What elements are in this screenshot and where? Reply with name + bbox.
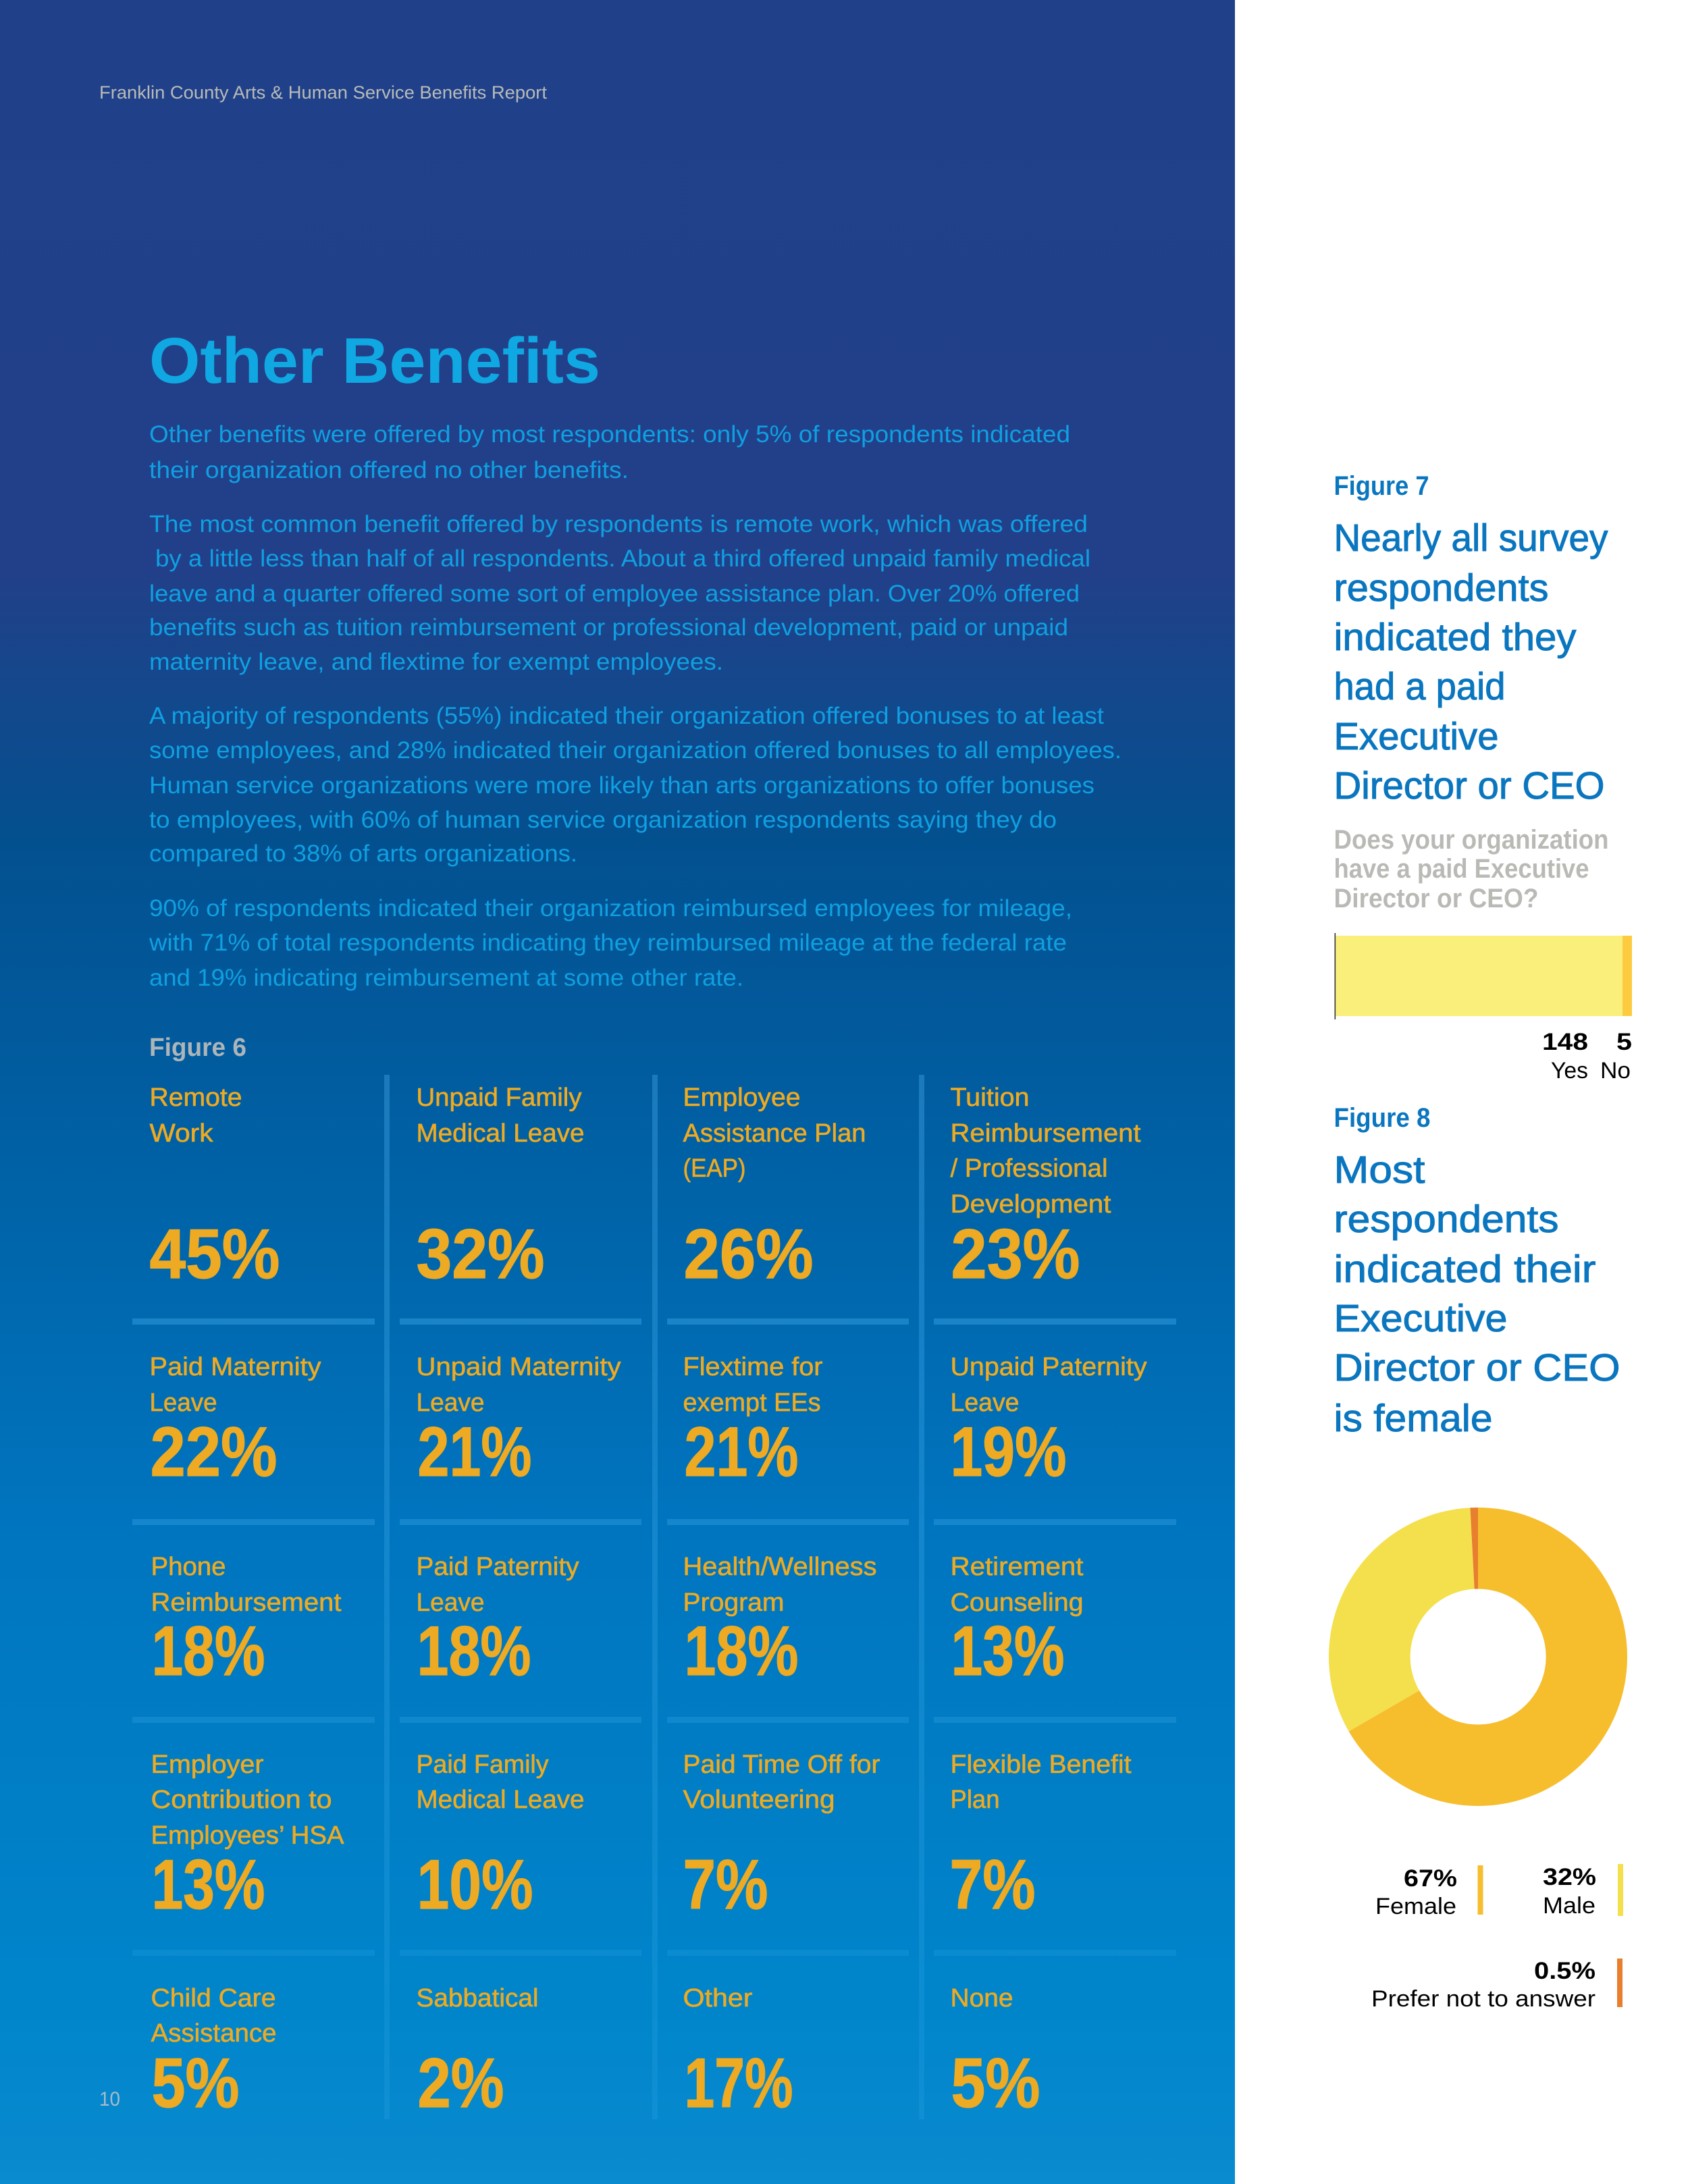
text block: figure 7 headline: Director or CEO (1334, 764, 1604, 807)
legend: Male 32% (1543, 1864, 1623, 1919)
stat: Paid Family Medical Leave: Paid Family (416, 1751, 548, 1779)
stat: Unpaid Paternity Leave: Leave (951, 1389, 1020, 1417)
stat: Unpaid Paternity Leave: Unpaid Paternity (951, 1353, 1146, 1381)
stat: Flexible Benefit Plan: Flexible Benefit (951, 1751, 1132, 1779)
stat: Paid Maternity Leave: Leave (150, 1389, 217, 1417)
stat: Employee Assistance Plan: Employee (683, 1084, 801, 1112)
stat: Sabbatical: 2% (417, 2044, 504, 2123)
text block: body copy: 90% of respondents indicated their organization reimbursed employees for mileage, (149, 895, 1072, 922)
stat: None: 5% (951, 2044, 1040, 2123)
heading: Figure 7: Figure 7 (1334, 471, 1429, 501)
panel: figure 6 benefits grid (150, 1084, 1146, 2123)
running header: Franklin County Arts & Human Service Benefits Report (99, 82, 547, 103)
legend: Yes 148: 148 (1542, 1029, 1588, 1055)
stat: Phone Reimbursement: 18% (151, 1612, 265, 1690)
stat: Unpaid Maternity Leave: Unpaid Maternity (416, 1353, 621, 1381)
stat: Retirement Counseling: 13% (951, 1612, 1064, 1690)
text block: figure 8 headline: Executive (1334, 1297, 1507, 1340)
stat: Retirement Counseling: Counseling (951, 1589, 1083, 1617)
stat: Remote Work: 45% (150, 1215, 280, 1294)
text block: figure 7 headline (1334, 516, 1608, 807)
stat: Health/Wellness Program: Health/Wellness (683, 1553, 876, 1581)
stat: Health/Wellness Program (683, 1553, 876, 1690)
panel: figure 7 (1334, 471, 1632, 1084)
legend: Yes 148 (1542, 1029, 1588, 1084)
stat: Employee Assistance Plan: (EAP) (683, 1154, 745, 1183)
stat: Tuition Reimbursement / Professional Development: Reimbursement (951, 1119, 1141, 1148)
stat: Child Care Assistance: 5% (151, 2044, 239, 2123)
donut chart: executive gender (1329, 1508, 1627, 1806)
stat: Paid Time Off for Volunteering: Paid Time Off for (683, 1751, 880, 1779)
legend: Female 67%: 67% (1404, 1865, 1457, 1892)
stat: Paid Time Off for Volunteering: 7% (683, 1846, 768, 1924)
panel: blue gradient main column (0, 0, 1235, 2184)
text block: survey question: Does your organization (1334, 825, 1608, 855)
legend: No 5 (1600, 1029, 1632, 1084)
stat: Child Care Assistance: Child Care (151, 1984, 275, 2013)
legend: Male 32%: Male (1543, 1893, 1595, 1919)
stat: Flexible Benefit Plan: 7% (949, 1846, 1036, 1924)
text block: body copy: and 19% indicating reimbursement at some other rate. (149, 964, 743, 991)
text block: figure 8 headline: Director or CEO (1334, 1346, 1620, 1389)
stat: Paid Paternity Leave: Paid Paternity (416, 1553, 579, 1581)
stat: Employer Contribution to Employees' HSA: 13% (151, 1846, 265, 1924)
stat: Retirement Counseling: Retirement (951, 1553, 1084, 1581)
stat: Tuition Reimbursement / Professional Development: 23% (951, 1215, 1080, 1294)
legend: Prefer not to answer 0.5%: 0.5% (1534, 1958, 1595, 1984)
stat: Unpaid Maternity Leave: Leave (416, 1389, 485, 1417)
text block: body copy: with 71% of total respondents indicating they reimbursed mileage at the federal rate (149, 929, 1067, 956)
text block: body copy: The most common benefit offered by respondents is remote work, which was offered (149, 510, 1088, 537)
stat: None (951, 1984, 1040, 2123)
text block: body copy (149, 421, 1122, 991)
stat: Phone Reimbursement: Reimbursement (151, 1589, 342, 1617)
stat: Unpaid Family Medical Leave: 32% (416, 1215, 544, 1294)
stat: Paid Time Off for Volunteering: Volunteering (683, 1786, 835, 1814)
stat: Sabbatical (416, 1984, 539, 2123)
stat: Unpaid Paternity Leave: 19% (951, 1413, 1067, 1491)
text block: body copy: maternity leave, and flextime for exempt employees. (149, 648, 723, 675)
legend: Male 32%: 32% (1543, 1864, 1596, 1890)
legend: No 5: No (1600, 1058, 1631, 1084)
stat: Paid Paternity Leave: 18% (417, 1612, 531, 1690)
text block: figure 8 headline: indicated their (1334, 1248, 1596, 1291)
legend: Yes 148: Yes (1551, 1058, 1588, 1084)
text block: body copy: Other benefits were offered by most respondents: only 5% of respondents indicated (149, 421, 1070, 448)
text block: body copy: to employees, with 60% of human service organization respondents saying they do (149, 806, 1057, 833)
stat: Phone Reimbursement: Phone (151, 1553, 226, 1581)
stat: Health/Wellness Program: Program (683, 1589, 785, 1617)
stat: Employee Assistance Plan (683, 1084, 866, 1294)
stat: Paid Time Off for Volunteering (683, 1751, 880, 1924)
text block: figure 7 headline: Nearly all survey (1334, 516, 1608, 560)
legend: No 5: 5 (1616, 1029, 1632, 1055)
legend: Prefer not to answer 0.5% (1371, 1958, 1623, 2012)
stat: Tuition Reimbursement / Professional Development: / Professional (951, 1154, 1107, 1183)
text block: body copy: by a little less than half of all respondents. About a third offered unpaid family medical (155, 545, 1090, 572)
stat: Employer Contribution to Employees' HSA: Contribution to (151, 1786, 332, 1814)
text block: figure 8 headline: Most (1334, 1148, 1425, 1192)
stat: Other: 17% (685, 2044, 793, 2123)
stat: Unpaid Paternity Leave (951, 1353, 1146, 1491)
stat: Child Care Assistance (151, 1984, 277, 2123)
stat: Unpaid Family Medical Leave: Unpaid Family (416, 1084, 582, 1112)
stat: Paid Family Medical Leave: 10% (417, 1846, 533, 1924)
stat: Flextime for exempt EEs: 21% (685, 1413, 798, 1491)
text block: body copy: A majority of respondents (55%) indicated their organization offered bonuses to at least (149, 702, 1104, 729)
stat: Tuition Reimbursement / Professional Development (951, 1084, 1141, 1294)
stat: Child Care Assistance: Assistance (151, 2019, 277, 2048)
text block: figure 7 headline: indicated they (1334, 616, 1577, 659)
bar chart: paid executive director (1334, 933, 1632, 1019)
stat: Phone Reimbursement (151, 1553, 342, 1690)
text block: body copy: some employees, and 28% indicated their organization offered bonuses to all employees. (149, 737, 1122, 764)
stat: Employer Contribution to Employees' HSA: Employer (151, 1751, 264, 1779)
stat: Employer Contribution to Employees' HSA: Employees’ HSA (151, 1821, 344, 1850)
stat: Paid Maternity Leave: Paid Maternity (150, 1353, 321, 1381)
stat: Flextime for exempt EEs: Flextime for (683, 1353, 823, 1381)
stat: Tuition Reimbursement / Professional Development: Tuition (951, 1084, 1029, 1112)
stat: Paid Family Medical Leave: Medical Leave (416, 1786, 585, 1814)
text block: survey question: have a paid Executive (1334, 854, 1589, 884)
text block: body copy: compared to 38% of arts organizations. (149, 840, 577, 867)
text block: figure 7 headline: had a paid (1334, 665, 1506, 708)
stat: Paid Maternity Leave (150, 1353, 321, 1491)
stat: Paid Family Medical Leave (416, 1751, 585, 1924)
stat: Unpaid Maternity Leave (416, 1353, 621, 1491)
text block: figure 7 headline: Executive (1334, 715, 1499, 758)
stat: Employee Assistance Plan: 26% (683, 1215, 813, 1294)
text block: figure 8 headline (1334, 1148, 1620, 1440)
stat: Remote Work (150, 1084, 280, 1294)
text block: figure 7 headline: respondents (1334, 566, 1549, 610)
stat: None: None (951, 1984, 1013, 2013)
title: Other Benefits: Other Benefits (149, 325, 600, 397)
stat: Sabbatical: Sabbatical (416, 1984, 539, 2013)
text block: body copy: Human service organizations were more likely than arts organizations to offer bonuses (149, 772, 1094, 799)
stat: Flextime for exempt EEs (683, 1353, 823, 1491)
text block: body copy: their organization offered no other benefits. (149, 456, 629, 483)
panel: figure 8 (1329, 1103, 1627, 2012)
stat: Unpaid Family Medical Leave: Medical Leave (416, 1119, 585, 1148)
text block: survey question: Director or CEO? (1334, 884, 1538, 913)
stat: Unpaid Maternity Leave: 21% (417, 1413, 532, 1491)
stat: Health/Wellness Program: 18% (685, 1612, 798, 1690)
stat: Other: Other (683, 1984, 753, 2013)
stat: Paid Maternity Leave: 22% (150, 1413, 277, 1491)
stat: Flexible Benefit Plan: Plan (951, 1786, 999, 1814)
stat: Employee Assistance Plan: Assistance Plan (683, 1119, 866, 1148)
text block: figure 8 headline: is female (1334, 1397, 1492, 1440)
stat: Flexible Benefit Plan (949, 1751, 1132, 1924)
stat: Tuition Reimbursement / Professional Development: Development (951, 1190, 1111, 1219)
stat: Employer Contribution to Employees' HSA (151, 1751, 344, 1924)
stat: Other (683, 1984, 793, 2123)
heading: Figure 8: Figure 8 (1334, 1103, 1430, 1133)
legend: Prefer not to answer 0.5%: Prefer not to answer (1371, 1986, 1595, 2012)
stat: Remote Work: Remote (150, 1084, 242, 1112)
stat: Flextime for exempt EEs: exempt EEs (683, 1389, 821, 1417)
text block: survey question (1334, 825, 1608, 913)
legend: Female 67%: Female (1375, 1894, 1456, 1919)
stat: Paid Paternity Leave (416, 1553, 579, 1690)
legend: Female 67% (1375, 1865, 1483, 1919)
page number: 10 (99, 2088, 120, 2110)
stat: Retirement Counseling (951, 1553, 1084, 1690)
text block: body copy: benefits such as tuition reimbursement or professional development, paid or unpaid (149, 614, 1068, 641)
stat: Unpaid Family Medical Leave (416, 1084, 585, 1294)
heading: Figure 6: Figure 6 (149, 1034, 246, 1062)
stat: Remote Work: Work (150, 1119, 214, 1148)
text block: body copy: leave and a quarter offered some sort of employee assistance plan. Over 20% offered (149, 580, 1080, 607)
stat: Paid Paternity Leave: Leave (416, 1589, 485, 1617)
text block: figure 8 headline: respondents (1334, 1198, 1558, 1241)
